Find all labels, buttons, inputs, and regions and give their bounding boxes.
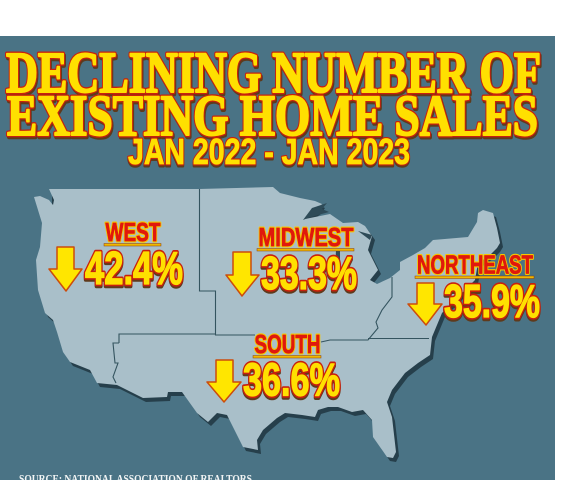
title xyxy=(6,40,542,150)
subtitle: JAN 2022 - JAN 2023 xyxy=(128,131,410,172)
region: South xyxy=(207,329,340,408)
region: South: 36.6% xyxy=(243,356,340,408)
lakes xyxy=(303,203,372,274)
region: South: 36.6% xyxy=(243,354,340,406)
region: Midwest xyxy=(226,222,357,301)
region: West: 42.4% xyxy=(85,242,183,294)
region: West: 42.4% xyxy=(85,242,183,294)
icon: down arrow xyxy=(226,252,259,296)
region: South: SOUTH xyxy=(254,329,320,359)
region: West xyxy=(49,217,183,296)
subtitle: JAN 2022 - JAN 2023 xyxy=(128,133,410,174)
region: Midwest: 33.3% xyxy=(261,249,357,301)
subtitle: JAN 2022 - JAN 2023 xyxy=(128,131,410,172)
icon: down arrow xyxy=(408,283,442,325)
region borders xyxy=(113,189,429,383)
region: South: SOUTH xyxy=(254,329,320,359)
region: West: WEST xyxy=(106,217,161,247)
region: West: WEST xyxy=(106,217,161,247)
region: Midwest: 33.3% xyxy=(261,247,357,299)
region: West: 42.4% xyxy=(85,244,183,296)
region: Midwest: MIDWEST xyxy=(258,222,354,252)
map of the United States xyxy=(34,187,503,462)
region: Midwest: 33.3% xyxy=(261,247,357,299)
region: South: 36.6% xyxy=(243,354,340,406)
icon: down arrow xyxy=(49,247,82,291)
region: Midwest: MIDWEST xyxy=(258,222,354,252)
region: Northeast xyxy=(408,250,540,329)
icon: down arrow xyxy=(207,360,241,402)
